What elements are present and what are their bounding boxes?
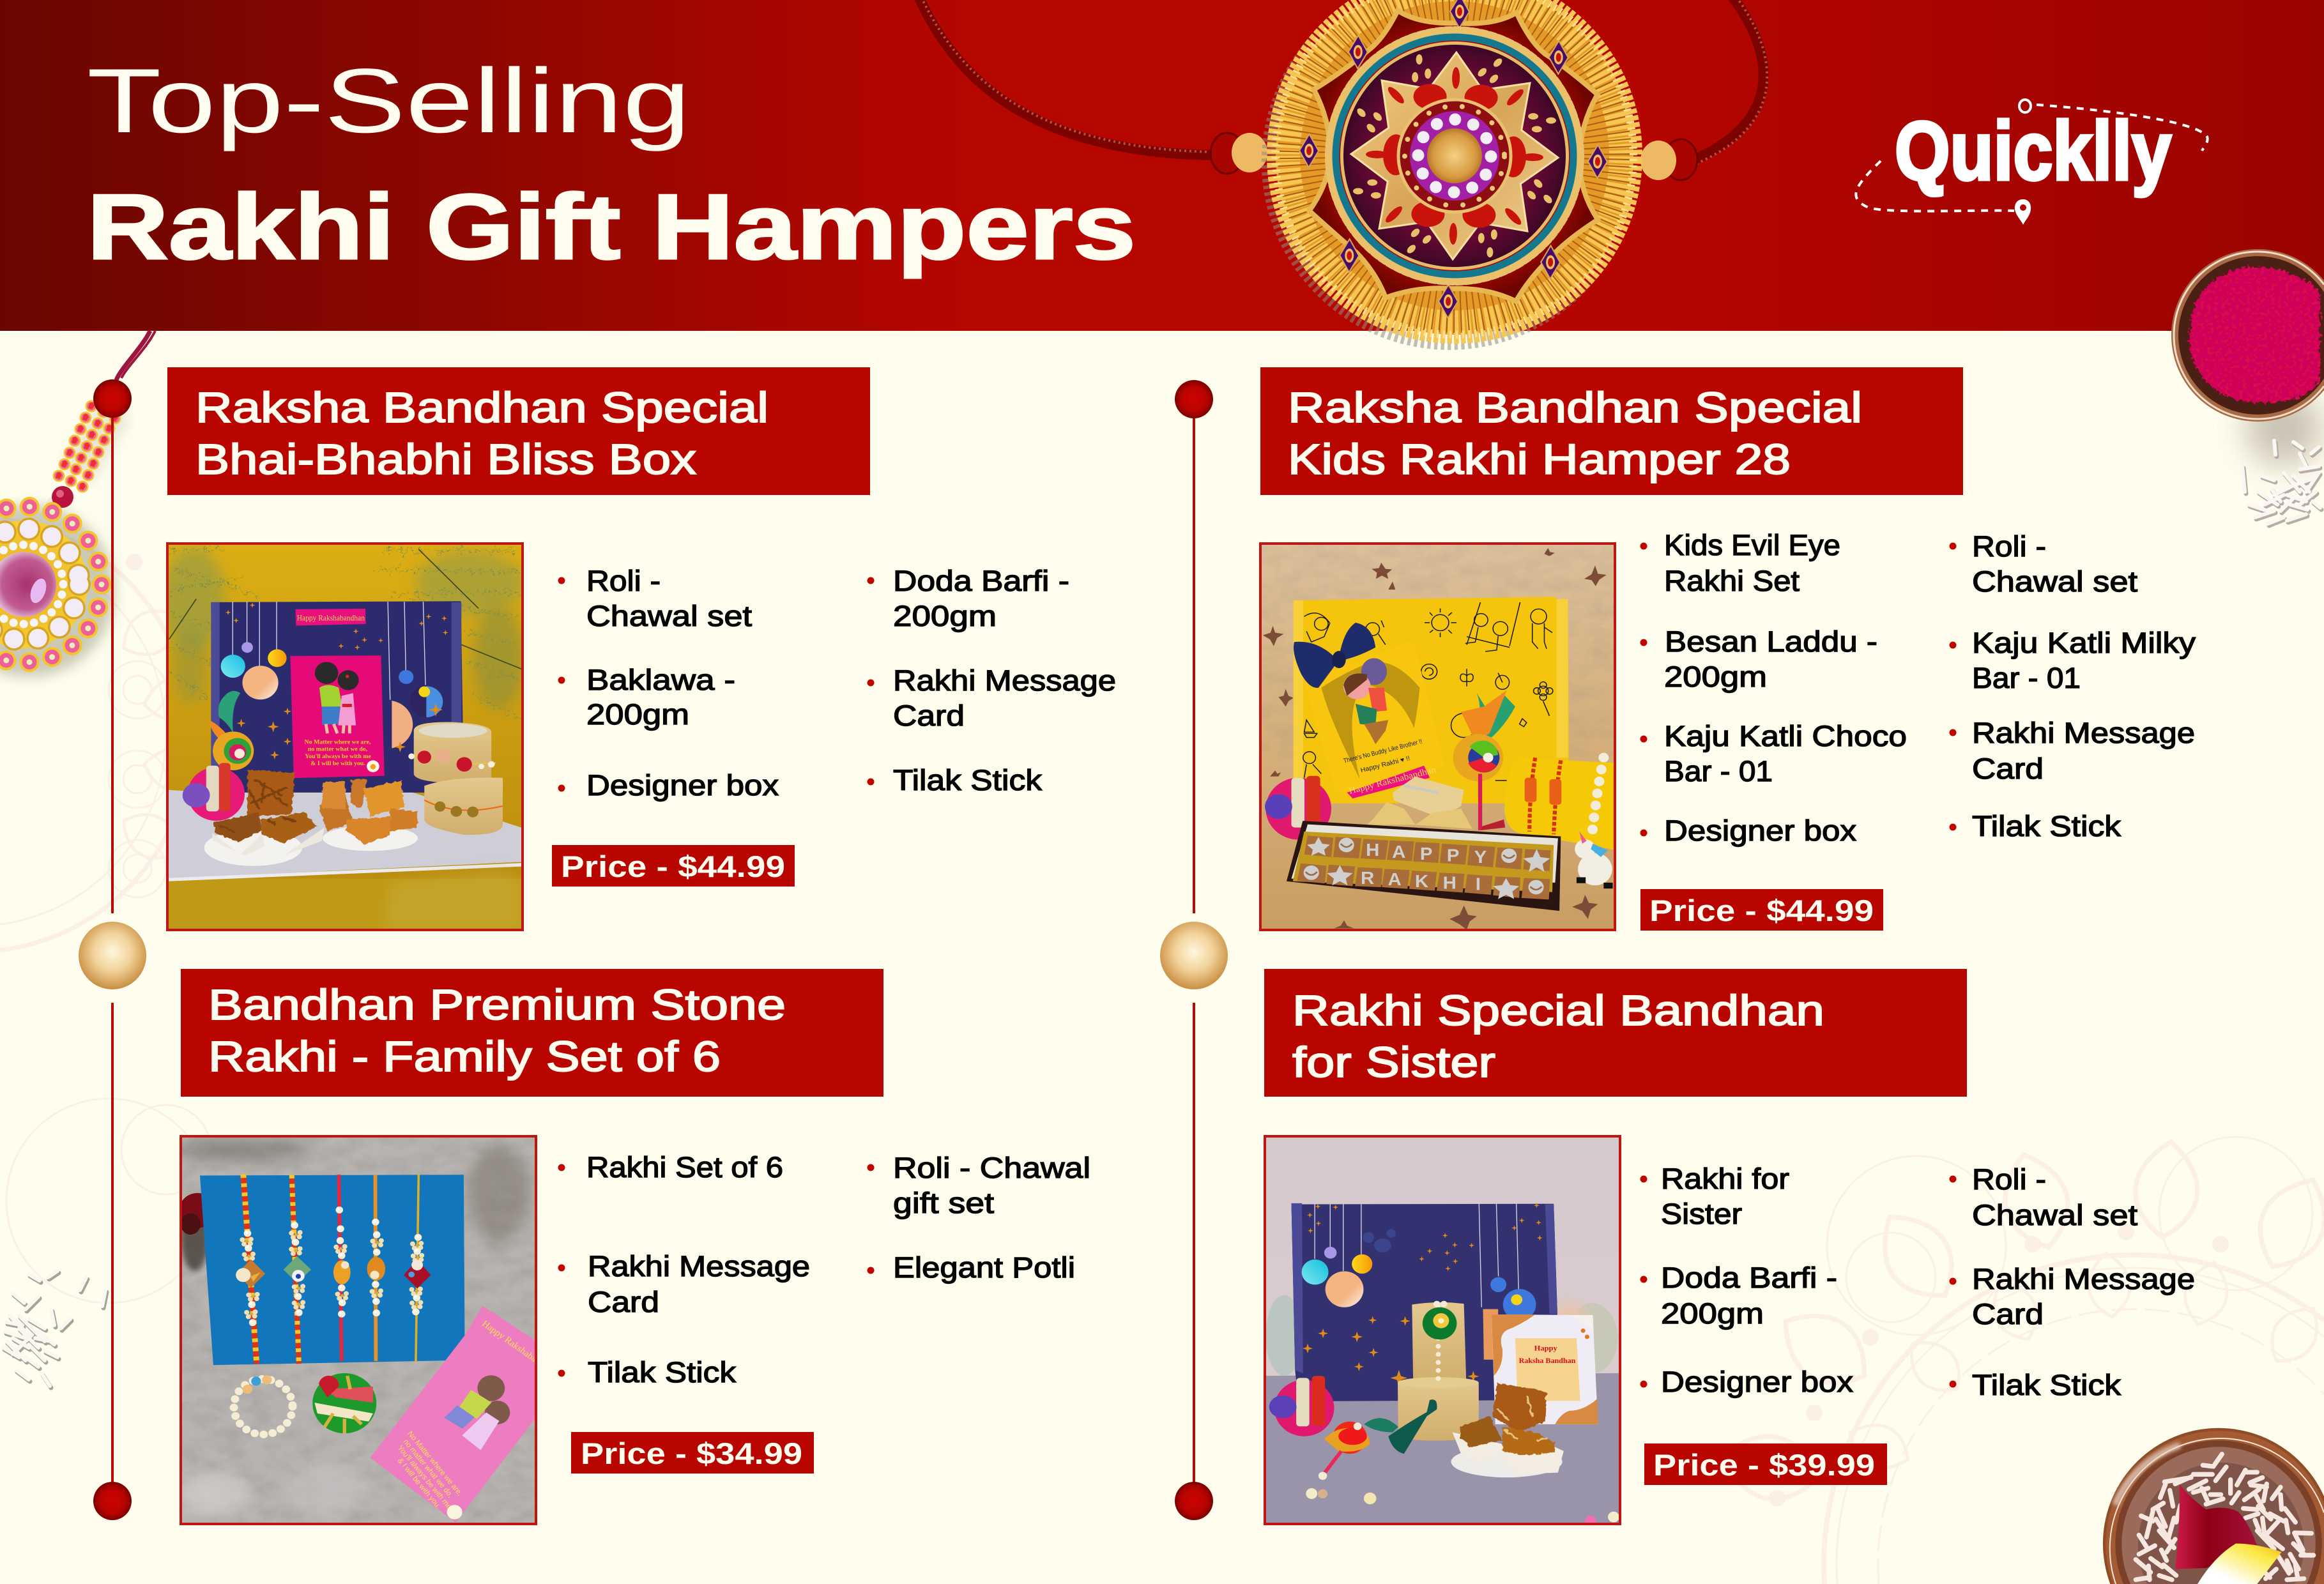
price tag: [1644, 1443, 1887, 1485]
product photo: I: [1476, 874, 1481, 894]
list column 1: Rakhi Message: [588, 1250, 810, 1283]
product photo: [1264, 1135, 1621, 1527]
product photo: [162, 542, 524, 932]
price tag: [552, 845, 795, 887]
heading: [1260, 367, 1963, 495]
logo: Quicklly: [1856, 100, 2208, 225]
heading: Rakhi - Family Set of 6: [208, 1033, 721, 1081]
product photo: K: [1415, 872, 1428, 892]
heading: [1264, 969, 1967, 1097]
product photo: Raksha Bandhan: [1519, 1357, 1576, 1365]
list column 2: gift set: [893, 1187, 995, 1219]
list column 1: Rakhi Set of 6: [586, 1151, 783, 1184]
list column 2: Chawal set: [1972, 1199, 2138, 1231]
heading: [167, 367, 870, 495]
product photo: H: [1366, 841, 1379, 860]
heading: Bhai-Bhabhi Bliss Box: [195, 436, 696, 484]
list column 1: Kaju Katli Choco: [1664, 720, 1907, 752]
title: Rakhi Gift Hampers: [87, 175, 1136, 278]
list column 1: [1640, 529, 1907, 847]
logo: Quicklly: Quicklly: [1895, 104, 2171, 197]
list column 2: Tilak Stick: [893, 764, 1043, 796]
rakhi thread: right: [1686, 0, 1767, 166]
heading: Raksha Bandhan Special: [195, 384, 768, 432]
product photo: A: [1392, 842, 1405, 862]
price tag: Price - $39.99: [1653, 1448, 1875, 1482]
product photo: Happy Rakhi ♥ !!: [1360, 755, 1411, 774]
heading: for Sister: [1292, 1039, 1495, 1086]
product photo: Happy: [1534, 1344, 1557, 1352]
rice grains: top right: [2242, 441, 2321, 526]
list column 2: Rakhi Message: [1972, 717, 2195, 749]
product photo: [1260, 542, 1617, 932]
product photo: No Matter where we are,: [406, 1430, 464, 1497]
price tag: Price - $44.99: [561, 849, 785, 883]
product photo: No Matter where we are,: [305, 739, 371, 745]
list column 1: Designer box: [1664, 814, 1857, 847]
product photo: You'll always be with me: [305, 753, 371, 760]
list column 1: Tilak Stick: [588, 1356, 737, 1389]
panel: Rakhi Special Bandhan for Sister: [1264, 969, 2195, 1527]
timeline: right: [1160, 380, 1228, 1520]
product photo: Happy Rakshabandhan: [297, 614, 365, 622]
list column 2: [868, 565, 1116, 796]
icon: jewelled pendant: [0, 400, 121, 677]
list column 2: Card: [1972, 752, 2044, 785]
list column 1: Chawal set: [586, 600, 753, 632]
list column 1: Rakhi for: [1661, 1162, 1789, 1195]
list column 2: Card: [893, 699, 965, 732]
title: Top-Selling: [87, 50, 691, 152]
list column 1: Designer box: [586, 769, 779, 802]
list column 1: Baklawa -: [586, 664, 735, 696]
header banner: [0, 0, 2324, 331]
list column 2: Roli -: [1972, 1163, 2046, 1196]
heading: Raksha Bandhan Special: [1288, 384, 1862, 432]
product photo: You'll always be with me: [395, 1444, 454, 1511]
list column 2: Rakhi Message: [1972, 1263, 2195, 1295]
background mandala: left: [0, 496, 213, 1303]
list column 1: Rakhi Set: [1664, 565, 1800, 597]
list column 2: Roli - Chawal: [893, 1152, 1090, 1184]
list column 1: Bar - 01: [1664, 755, 1773, 788]
product photo: Y: [1474, 848, 1487, 867]
product photo: & I will be with you.: [395, 1457, 443, 1511]
list column 1: Besan Laddu -: [1665, 625, 1877, 658]
list column 2: Tilak Stick: [1972, 810, 2121, 842]
list column 1: 200gm: [1664, 660, 1767, 693]
rice grains: left: [3, 1271, 107, 1388]
product photo: Happy Rakshabandhan: [480, 1319, 558, 1378]
list column 1: 200gm: [1661, 1297, 1764, 1330]
list column 1: [558, 1151, 810, 1389]
list column 2: Doda Barfi -: [893, 565, 1069, 597]
list column 1: [1640, 1162, 1854, 1398]
price tag: [1640, 889, 1883, 931]
list column 2: Tilak Stick: [1972, 1369, 2121, 1401]
product photo: P: [1420, 844, 1432, 864]
list column 1: Designer box: [1661, 1366, 1854, 1398]
list column 2: 200gm: [893, 600, 997, 632]
list column 1: Card: [588, 1286, 659, 1318]
list column 2: Card: [1972, 1298, 2044, 1330]
product photo: no matter what we do,: [401, 1438, 455, 1499]
list column 1: Doda Barfi -: [1661, 1261, 1837, 1294]
price tag: Price - $44.99: [1649, 894, 1874, 927]
product photo: P: [1447, 846, 1459, 865]
icon: bottom right rice bowl with petals: [2103, 1428, 2324, 1584]
heading: Rakhi Special Bandhan: [1292, 987, 1824, 1035]
list column 2: [1950, 1163, 2195, 1401]
product photo: R: [1361, 869, 1375, 888]
price tag: [571, 1432, 814, 1474]
list column 2: Rakhi Message: [893, 664, 1116, 697]
product photo: A: [1388, 870, 1402, 890]
list column 1: 200gm: [586, 698, 689, 731]
product photo: Happy Rakshabandhan: [1348, 765, 1437, 796]
heading: Bandhan Premium Stone: [208, 981, 786, 1029]
product photo: no matter what we do,: [308, 746, 368, 753]
background mandala: bottom right: [1715, 1137, 2324, 1584]
product photo: [173, 1135, 558, 1525]
price tag: Price - $34.99: [581, 1436, 802, 1470]
list column 2: [868, 1152, 1090, 1284]
icon: large golden rakhi: [1273, 0, 1637, 339]
product photo: H: [1443, 873, 1456, 893]
list column 2: [1950, 530, 2196, 842]
list column 1: Sister: [1661, 1198, 1742, 1230]
icon: kumkum bowl: [2171, 249, 2324, 466]
list column 2: Chawal set: [1972, 565, 2138, 598]
list column 1: Kids Evil Eye: [1664, 529, 1840, 561]
rakhi thread: left: [919, 0, 1217, 155]
heading: [181, 969, 883, 1097]
list column 1: [558, 565, 779, 802]
product photo: There's No Buddy Like Brother !!: [1343, 738, 1423, 765]
rakhi beads: right: [1640, 139, 1697, 180]
title: [87, 50, 1136, 278]
panel: Bhai-Bhabhi Bliss Box: [162, 367, 1116, 932]
rakhi beads: left: [1211, 133, 1267, 174]
heading: Kids Rakhi Hamper 28: [1288, 436, 1791, 484]
product photo: & I will be with you.: [310, 760, 365, 767]
timeline: left: [0, 331, 155, 1520]
panel: Kids Rakhi Hamper 28: [1260, 367, 2196, 932]
list column 2: Roli -: [1972, 530, 2046, 563]
list column 2: Bar - 01: [1972, 662, 2081, 694]
panel: Bandhan Premium Stone Rakhi: [173, 969, 1090, 1525]
list column 2: Kaju Katli Milky: [1972, 627, 2196, 659]
list column 2: Elegant Potli: [893, 1251, 1075, 1284]
list column 1: Roli -: [586, 565, 661, 597]
